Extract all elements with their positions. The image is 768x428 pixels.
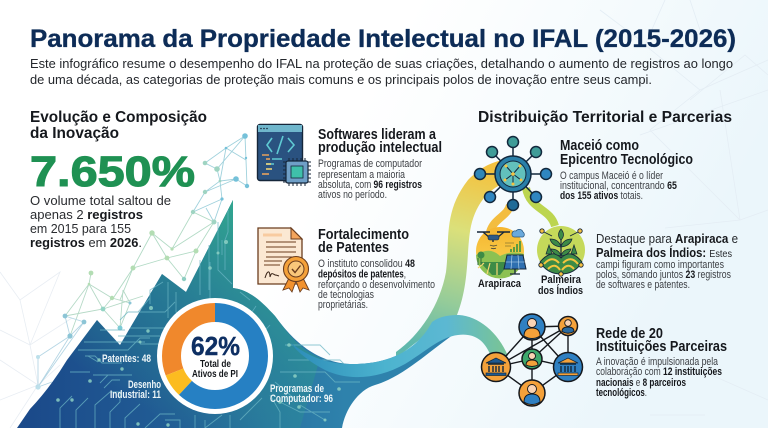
software text [318, 127, 442, 201]
text: Maceió: institucional, concentrando 65 [560, 180, 677, 192]
software text: Softwares lideram a [318, 127, 437, 143]
ribbon: Maceió to Palmeira [526, 188, 555, 226]
software text: Programas de computador [318, 158, 422, 170]
software text: absoluta, com 96 registros [318, 179, 422, 191]
donut chart [157, 298, 273, 414]
text: Arapiraca e Palmeira: campi figuram como importantes [596, 259, 724, 271]
text: partner institutions [596, 326, 727, 399]
text: partner institutions: tecnológicos. [596, 387, 647, 399]
left heading [30, 109, 207, 142]
donut labels: Patentes: 48 [102, 353, 151, 365]
patents text: depósitos de patentes, [318, 268, 406, 280]
stat description: em 2015 para 155 [30, 221, 131, 236]
donut chart: Ativos de PI [192, 368, 238, 380]
donut labels [102, 353, 333, 405]
circuit traces [60, 210, 360, 428]
stat description: O volume total saltou de [30, 193, 171, 208]
patents text: de tecnologias [318, 289, 374, 301]
patents text: O instituto consolidou 48 [318, 258, 415, 270]
patents text [318, 227, 435, 311]
icon: partner network [482, 314, 582, 406]
text: Arapiraca e Palmeira: polos, somando juntos 23 registros [596, 269, 731, 281]
text: partner institutions: Instituições Parceiras [596, 339, 727, 355]
software text: produção intelectual [318, 140, 442, 156]
donut chart: 62% [191, 331, 240, 361]
network graphic above growth mountain [35, 133, 249, 390]
icon: Arapiraca [476, 227, 526, 278]
text: Maceió: O campus Maceió é o líder [560, 170, 663, 182]
text: Arapiraca e Palmeira [596, 231, 738, 291]
text: Maceió: dos 155 ativos totais. [560, 190, 643, 202]
intro text: Este infográfico resume o desempenho do IFAL na proteção de suas criações, detalhando o aumento de registros ao longo [30, 57, 733, 71]
left heading: da Inovação [30, 125, 119, 142]
donut labels: Computador: 96 [270, 393, 333, 405]
campus labels: Palmeira [541, 274, 582, 286]
campus labels [478, 274, 583, 297]
text: Arapiraca e Palmeira: Destaque para Arapiraca e [596, 231, 738, 246]
left heading: Evolução e Composição [30, 109, 207, 126]
patents text: de Patentes [318, 240, 389, 256]
text: partner institutions: A inovação é impulsionada pela [596, 356, 719, 368]
title: Panorama da Propriedade Intelectual no IFAL (2015-2026) [30, 25, 736, 53]
patents text: proprietárias. [318, 299, 368, 311]
stat description: registros em 2026. [30, 235, 142, 250]
icon: patent document with medal [258, 228, 309, 292]
campus labels: Arapiraca [478, 278, 522, 290]
text: Maceió: Maceió como [560, 138, 639, 154]
text: partner institutions: Rede de 20 [596, 326, 663, 342]
software text: representam a maioria [318, 169, 406, 181]
donut labels: Desenho [128, 379, 161, 391]
intro text: de uma década, as categorias de proteção mais comuns e os principais polos de inovação entre seus campi. [30, 73, 652, 87]
donut labels: Programas de [270, 383, 324, 395]
icon: Maceió tech hub [474, 136, 552, 210]
text: partner institutions: nacionais e 8 parceiros [596, 377, 686, 389]
text: Maceió: Epicentro Tecnológico [560, 152, 693, 168]
ribbon: Maceió to Arapiraca [490, 205, 510, 232]
donut labels: Industrial: 11 [110, 389, 161, 401]
patents text: reforçando o desenvolvimento [318, 279, 435, 291]
right heading: Distribuição Territorial e Parcerias [478, 109, 732, 126]
big stat: 7.650% [30, 148, 195, 196]
campus labels: dos Índios [538, 284, 583, 297]
text: Arapiraca e Palmeira: Palmeira dos Índios: Estes [596, 245, 732, 260]
software text: ativos no período. [318, 189, 387, 201]
donut chart: Total de [200, 358, 231, 370]
teal-green flow ribbon to Maceió [396, 160, 512, 358]
text: partner institutions: colaboração com 12 instituições [596, 366, 722, 378]
text: Maceió [560, 138, 693, 202]
blue flow ribbon to partner network [291, 315, 508, 377]
patents text: Fortalecimento [318, 227, 409, 243]
icon: Palmeira dos Índios [537, 226, 585, 276]
stat description: apenas 2 registros [30, 207, 143, 222]
stat description [30, 193, 171, 250]
growth mountain with circuit pattern [17, 200, 460, 428]
intro text [30, 57, 733, 87]
icon: software window with chip [258, 124, 311, 186]
text: Arapiraca e Palmeira: de softwares e patentes. [596, 279, 690, 291]
